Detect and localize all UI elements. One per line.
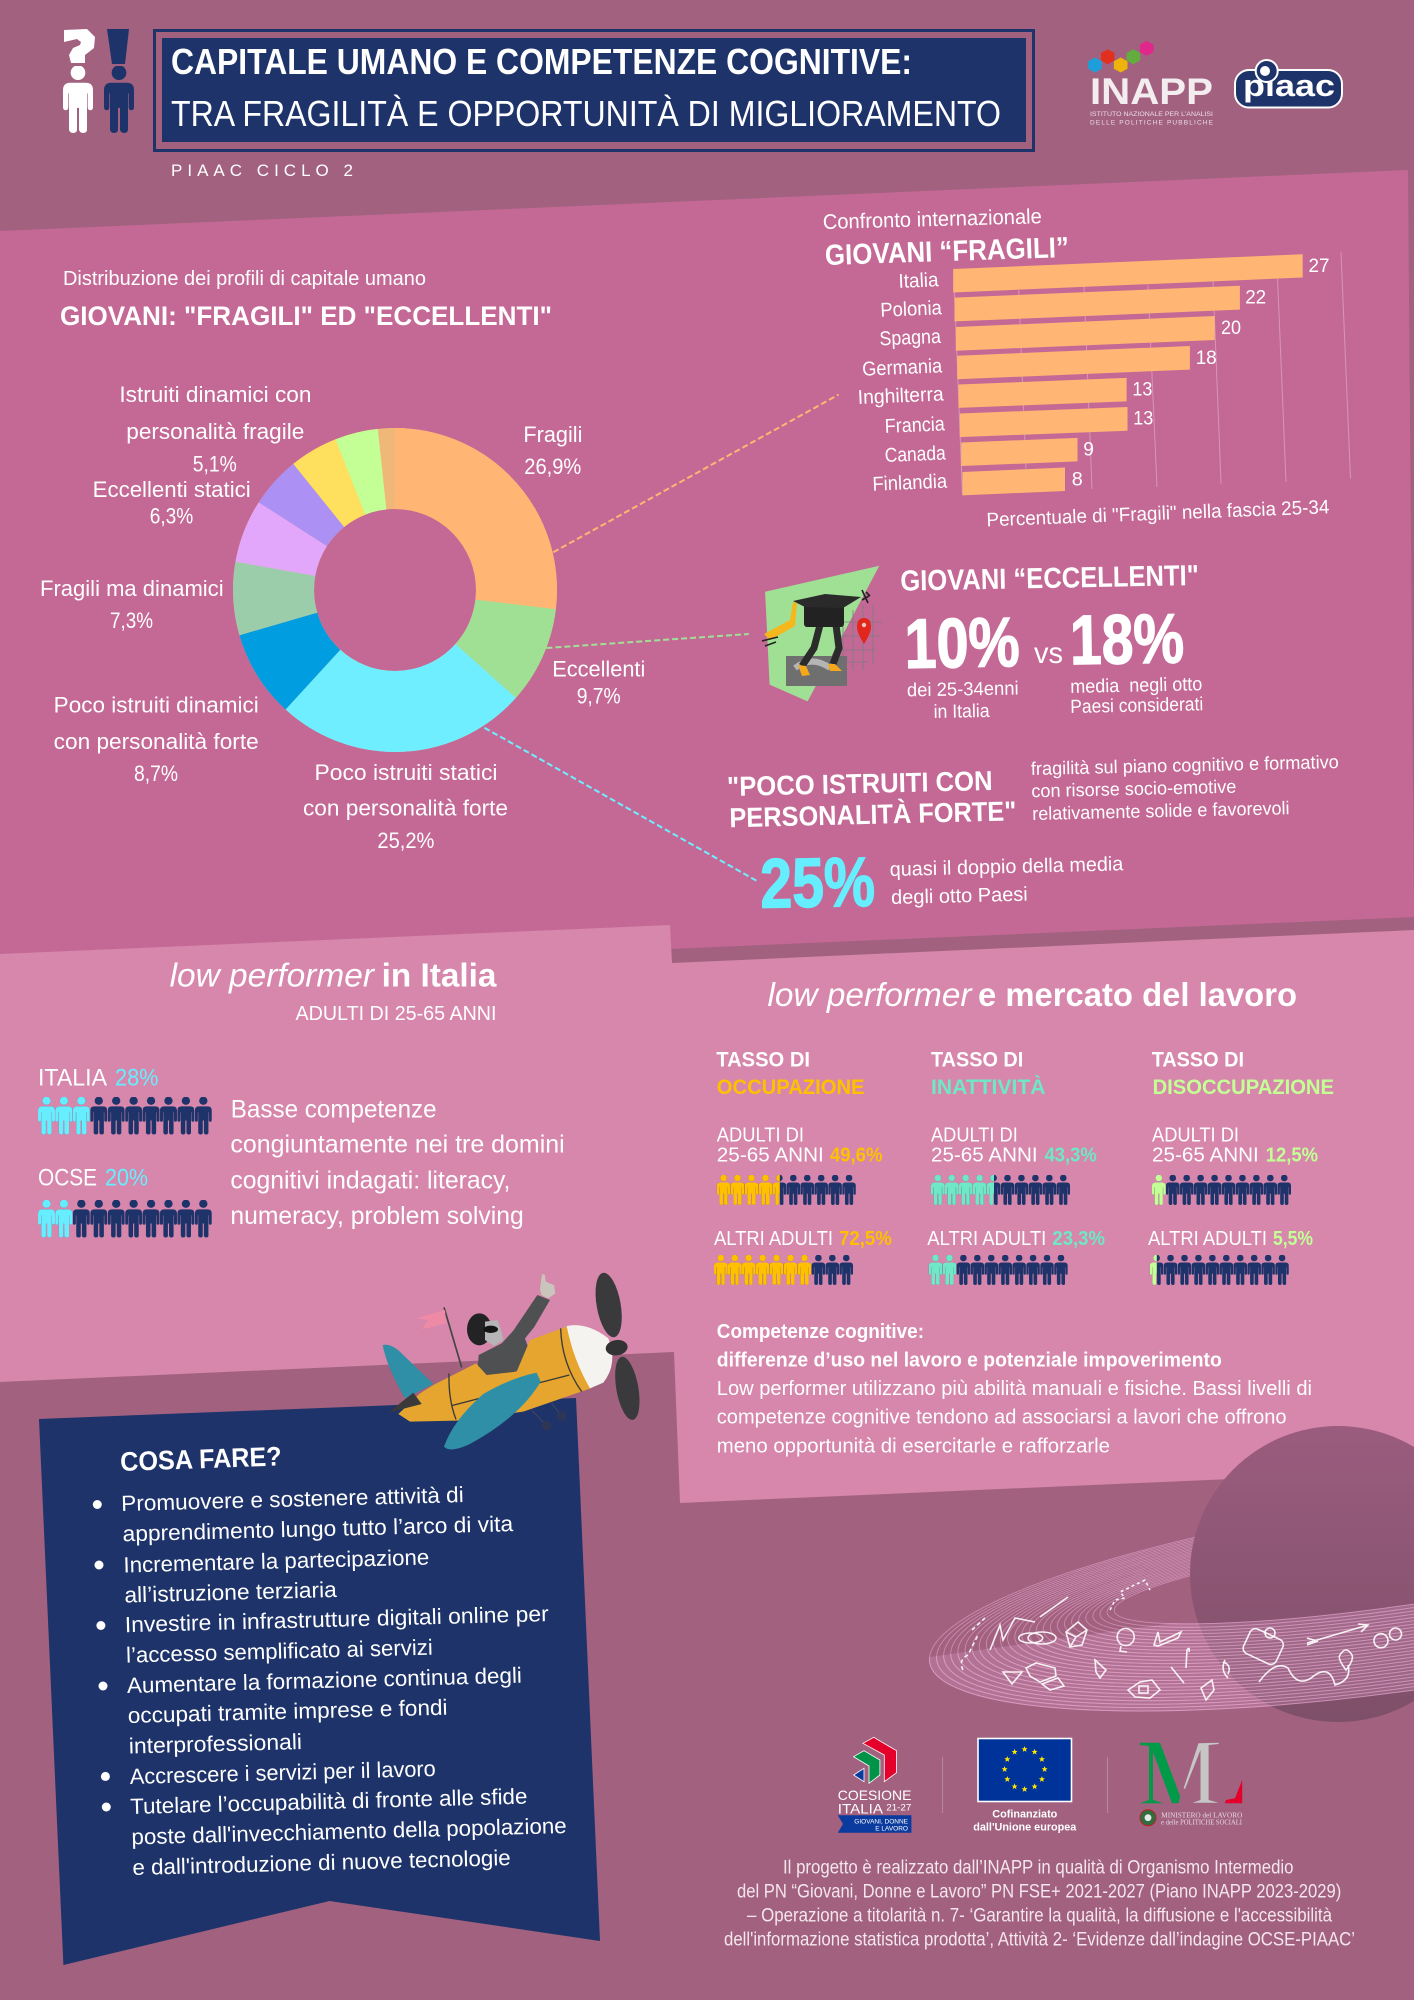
pictogram: OCSE 20%: 20%: [105, 1165, 148, 1192]
block: poco istruiti con personalita forte: con risorse socio-emotive: [1031, 776, 1237, 801]
heading: low performer in Italia: [170, 957, 497, 1025]
column: tasso di inattivita: 23,3%: [1052, 1228, 1105, 1250]
logo: ministero del lavoro: e delle POLITICHE SOCIALI: [1161, 1818, 1242, 1827]
column: tasso di disoccupazione: 12,5%: [1266, 1145, 1318, 1167]
donut labels: 7,3%: [110, 608, 153, 633]
title box: CAPITALE UMANO E COMPETENZE COGNITIVE:: [171, 41, 912, 82]
donut labels: personalità fragile: [126, 419, 304, 444]
ribbon: cosa fare: l’accesso semplificato ai servizi: [126, 1635, 433, 1668]
column: tasso di occupazione: ALTRI ADULTI: [714, 1228, 833, 1250]
panel: low performer: [0, 925, 1414, 1503]
column: tasso di inattivita: 43,3%: [1045, 1145, 1097, 1167]
column: tasso di occupazione: TASSO DI: [716, 1048, 810, 1072]
ribbon: cosa fare: occupati tramite imprese e fondi: [127, 1695, 448, 1728]
logo: INAPP: INAPP: [1090, 71, 1213, 112]
logo: EU flag: Cofinanziato: [992, 1809, 1058, 1821]
block: giovani eccellenti: [900, 560, 1203, 723]
block: poco istruiti con personalita forte: 25%: [760, 843, 876, 923]
donut labels: 26,9%: [524, 454, 581, 479]
column: tasso di occupazione: 72,5%: [839, 1228, 892, 1250]
ribbon: cosa fare: e dall'introduzione di nuove tecnologie: [132, 1845, 511, 1880]
heading: low performer e mercato del lavoro: low performer: [768, 976, 974, 1013]
heading: low performer in Italia: in Italia: [382, 957, 497, 994]
bar chart: giovani fragili: Percentuale di "Fragili" nella fascia 25-34: [986, 496, 1330, 531]
block: poco istruiti con personalita forte: relativamente solide e favorevoli: [1032, 797, 1290, 824]
bar chart: giovani fragili: [857, 252, 1350, 531]
text: competenze cognitive: [717, 1320, 1312, 1457]
donut labels: Poco istruiti statici: [314, 760, 498, 785]
column: tasso di inattivita: ALTRI ADULTI: [927, 1228, 1046, 1250]
bar chart: giovani fragili: Spagna: [879, 326, 942, 350]
heading: low performer e mercato del lavoro: [768, 976, 1297, 1013]
donut labels: con personalità forte: [54, 729, 259, 754]
column: tasso di inattivita: [927, 1048, 1105, 1285]
illustration: planet with ring of icons: [929, 1426, 1414, 1722]
logo: coesione italia: GIOVANI, DONNE: [854, 1818, 909, 1825]
heading: low performer in Italia: low performer: [170, 957, 376, 994]
column: tasso di inattivita: ADULTI DI: [931, 1125, 1018, 1147]
heading: distribuzione: Distribuzione dei profili di capitale umano: [63, 268, 426, 290]
column: tasso di inattivita: INATTIVITÀ: [931, 1074, 1046, 1099]
ribbon: cosa fare: all’istruzione terziaria: [124, 1577, 338, 1607]
column: tasso di occupazione: [714, 1048, 892, 1285]
logo: piaac: piaac: [1243, 68, 1335, 103]
logo: INAPP: DELLE POLITICHE PUBBLICHE: [1090, 120, 1214, 127]
column: tasso di disoccupazione: TASSO DI: [1152, 1048, 1244, 1072]
column: tasso di occupazione: OCCUPAZIONE: [717, 1075, 864, 1099]
bar chart: giovani fragili: 13: [1132, 380, 1152, 401]
text: competenze cognitive: meno opportunità di esercitarle e rafforzarle: [717, 1434, 1110, 1457]
text: basse competenze: numeracy, problem solving: [230, 1202, 524, 1230]
bar chart: giovani fragili: Inghilterra: [857, 383, 945, 409]
heading: low performer e mercato del lavoro: e mercato del lavoro: [978, 976, 1297, 1013]
heading: distribuzione: GIOVANI: "FRAGILI" ED "ECCELLENTI": [60, 301, 552, 331]
logo: coesione italia: [838, 1737, 911, 1833]
column: tasso di inattivita: TASSO DI: [931, 1048, 1023, 1072]
logo: piaac: [1235, 60, 1342, 108]
ribbon: cosa fare: Promuovere e sostenere attività di: [121, 1482, 464, 1516]
logo: ministero del lavoro: [1140, 1743, 1243, 1827]
icon: question and exclamation people: [63, 29, 134, 133]
donut labels: Fragili ma dinamici: [40, 576, 224, 601]
logo: coesione italia: COESIONE: [838, 1787, 911, 1803]
bar chart: giovani fragili: Francia: [884, 413, 946, 438]
column: tasso di disoccupazione: ADULTI DI: [1152, 1125, 1239, 1147]
ribbon: cosa fare: Tutelare l’occupabilità di fronte alle sfide: [130, 1784, 528, 1819]
block: giovani eccellenti: vs: [1034, 637, 1063, 670]
donut labels: 8,7%: [134, 761, 178, 786]
logo: coesione italia: 21-27: [886, 1803, 911, 1813]
column: tasso di inattivita: 25-65 ANNI: [931, 1145, 1038, 1167]
donut labels: Eccellenti: [552, 657, 645, 682]
pictogram: Italia 28%: ITALIA: [38, 1065, 107, 1092]
dashed connector: fragili: [553, 395, 839, 552]
column: tasso di occupazione: 49,6%: [830, 1145, 883, 1167]
ribbon: cosa fare: [39, 1398, 600, 1965]
subtitle: PIAAC ciclo 2: PIAAC CICLO 2: [171, 161, 353, 180]
bar chart: giovani fragili: 22: [1245, 288, 1266, 309]
bar chart: giovani fragili: Polonia: [880, 297, 943, 322]
footer note: del PN “Giovani, Donne e Lavoro” PN FSE+ 2021-2027 (Piano INAPP 2023-2029): [737, 1881, 1341, 1902]
bar chart: giovani fragili: Finlandia: [872, 471, 948, 496]
block: poco istruiti con personalita forte: [727, 751, 1339, 923]
ribbon: cosa fare: Aumentare la formazione continua degli: [127, 1663, 522, 1698]
heading: distribuzione: [60, 268, 552, 331]
block: poco istruiti con personalita forte: PERSONALITÀ FORTE": [729, 795, 1017, 833]
logo: coesione italia: ITALIA: [838, 1800, 884, 1816]
logo: EU flag: dall'Unione europea: [973, 1822, 1077, 1834]
heading: confronto internazionale: [823, 205, 1069, 272]
bar chart: giovani fragili: Italia: [898, 269, 940, 293]
dashed connector: poco istruiti: [484, 728, 757, 881]
column: tasso di disoccupazione: 25-65 ANNI: [1152, 1145, 1259, 1167]
donut labels: [40, 382, 645, 853]
donut labels: 5,1%: [193, 451, 237, 476]
column: tasso di disoccupazione: ALTRI ADULTI: [1148, 1228, 1267, 1250]
donut labels: Eccellenti statici: [93, 477, 251, 502]
column: tasso di occupazione: 25-65 ANNI: [717, 1145, 824, 1167]
illustration: graduate figure: [762, 566, 882, 701]
logo: ministero del lavoro: MINISTERO del LAVORO: [1161, 1810, 1243, 1819]
donut labels: Poco istruiti dinamici: [54, 693, 259, 718]
donut labels: 25,2%: [377, 828, 434, 853]
block: giovani eccellenti: media negli otto: [1070, 674, 1202, 698]
text: competenze cognitive: Low performer utilizzano più abilità manuali e fisiche. Bassi livelli di: [717, 1377, 1312, 1400]
bar chart: giovani fragili: 13: [1133, 409, 1153, 430]
text: basse competenze: cognitivi indagati: literacy,: [230, 1166, 510, 1194]
title box: [154, 30, 1034, 150]
pictogram: OCSE 20%: OCSE: [38, 1165, 97, 1192]
column: tasso di disoccupazione: 5,5%: [1273, 1228, 1313, 1250]
donut labels: con personalità forte: [303, 796, 508, 820]
ribbon: cosa fare: Incrementare la partecipazione: [123, 1545, 430, 1577]
block: giovani eccellenti: dei 25-34enni: [907, 678, 1019, 701]
ribbon: cosa fare: Accrescere i servizi per il lavoro: [129, 1756, 436, 1789]
logo: EU flag: [973, 1738, 1077, 1834]
block: giovani eccellenti: Paesi considerati: [1070, 694, 1203, 718]
block: giovani eccellenti: 10%: [904, 603, 1020, 683]
heading: low performer in Italia: ADULTI DI 25-65 ANNI: [296, 1002, 496, 1025]
bar chart: giovani fragili: 9: [1083, 440, 1094, 461]
block: poco istruiti con personalita forte: degli otto Paesi: [891, 884, 1028, 909]
divider: [1106, 1757, 1108, 1813]
bar chart: giovani fragili: Germania: [862, 355, 943, 381]
panel: giovani: [0, 170, 1414, 970]
bar chart: giovani fragili: 18: [1196, 348, 1217, 369]
column: tasso di disoccupazione: DISOCCUPAZIONE: [1153, 1075, 1334, 1099]
donut labels: 9,7%: [577, 683, 621, 708]
pictogram: Italia 28%: [38, 1065, 212, 1134]
block: giovani eccellenti: in Italia: [933, 701, 990, 723]
ribbon: cosa fare: poste dall'invecchiamento della popolazione: [131, 1813, 567, 1849]
text: competenze cognitive: differenze d’uso nel lavoro e potenziale impoverimento: [717, 1349, 1222, 1372]
text: basse competenze: Basse competenze: [231, 1095, 437, 1123]
block: poco istruiti con personalita forte: "POCO ISTRUITI CON: [727, 765, 993, 802]
heading: confronto internazionale: GIOVANI “FRAGILI”: [824, 232, 1069, 272]
footer note: Il progetto è realizzato dall’INAPP in qualità di Organismo Intermedio: [783, 1857, 1294, 1878]
block: giovani eccellenti: GIOVANI “ECCELLENTI": [900, 560, 1199, 598]
block: poco istruiti con personalita forte: quasi il doppio della media: [889, 853, 1124, 881]
text: basse competenze: [230, 1095, 565, 1230]
bar chart: giovani fragili: Canada: [884, 442, 947, 467]
footer note: – Operazione a titolarità n. 7- ‘Garantire la qualità, la diffusione e l'accessibilità: [747, 1905, 1332, 1926]
text: basse competenze: congiuntamente nei tre domini: [230, 1130, 565, 1158]
pictogram: Italia 28%: 28%: [115, 1065, 158, 1092]
logo: INAPP: ISTITUTO NAZIONALE PER L'ANALISI: [1090, 111, 1213, 118]
ribbon: cosa fare: Investire in infrastrutture digitali online per: [124, 1601, 549, 1637]
donut labels: Istruiti dinamici con: [119, 382, 311, 407]
divider: [942, 1757, 944, 1813]
block: poco istruiti con personalita forte: fragilità sul piano cognitivo e formativo: [1031, 751, 1339, 779]
logo: coesione italia: E LAVORO: [875, 1825, 908, 1832]
donut labels: 6,3%: [150, 504, 193, 529]
illustration: pilot on plane: [383, 1271, 644, 1449]
column: tasso di occupazione: ADULTI DI: [717, 1125, 804, 1147]
heading: confronto internazionale: Confronto internazionale: [823, 205, 1042, 234]
ribbon: cosa fare: apprendimento lungo tutto l’arco di vita: [122, 1511, 514, 1546]
ribbon: cosa fare: interprofessionali: [128, 1729, 302, 1758]
title box: TRA FRAGILITÀ E OPPORTUNITÀ DI MIGLIORAMENTO: [171, 93, 1001, 134]
bar chart: giovani fragili: 27: [1308, 256, 1330, 277]
block: giovani eccellenti: 18%: [1069, 599, 1185, 679]
donut chart: [274, 468, 516, 712]
ribbon: cosa fare: COSA FARE?: [120, 1441, 282, 1477]
bar chart: giovani fragili: 8: [1072, 469, 1083, 490]
donut labels: Fragili: [523, 422, 582, 447]
column: tasso di disoccupazione: [1148, 1048, 1334, 1285]
text: competenze cognitive: Competenze cognitive:: [717, 1320, 924, 1343]
pictogram: OCSE 20%: [38, 1165, 212, 1238]
logo: INAPP: [1088, 41, 1214, 127]
bar chart: giovani fragili: 20: [1221, 318, 1241, 339]
text: competenze cognitive: competenze cognitive tendono ad associarsi a lavori che offrono: [717, 1405, 1286, 1428]
footer note: [724, 1857, 1355, 1950]
dashed connector: eccellenti: [546, 634, 749, 648]
